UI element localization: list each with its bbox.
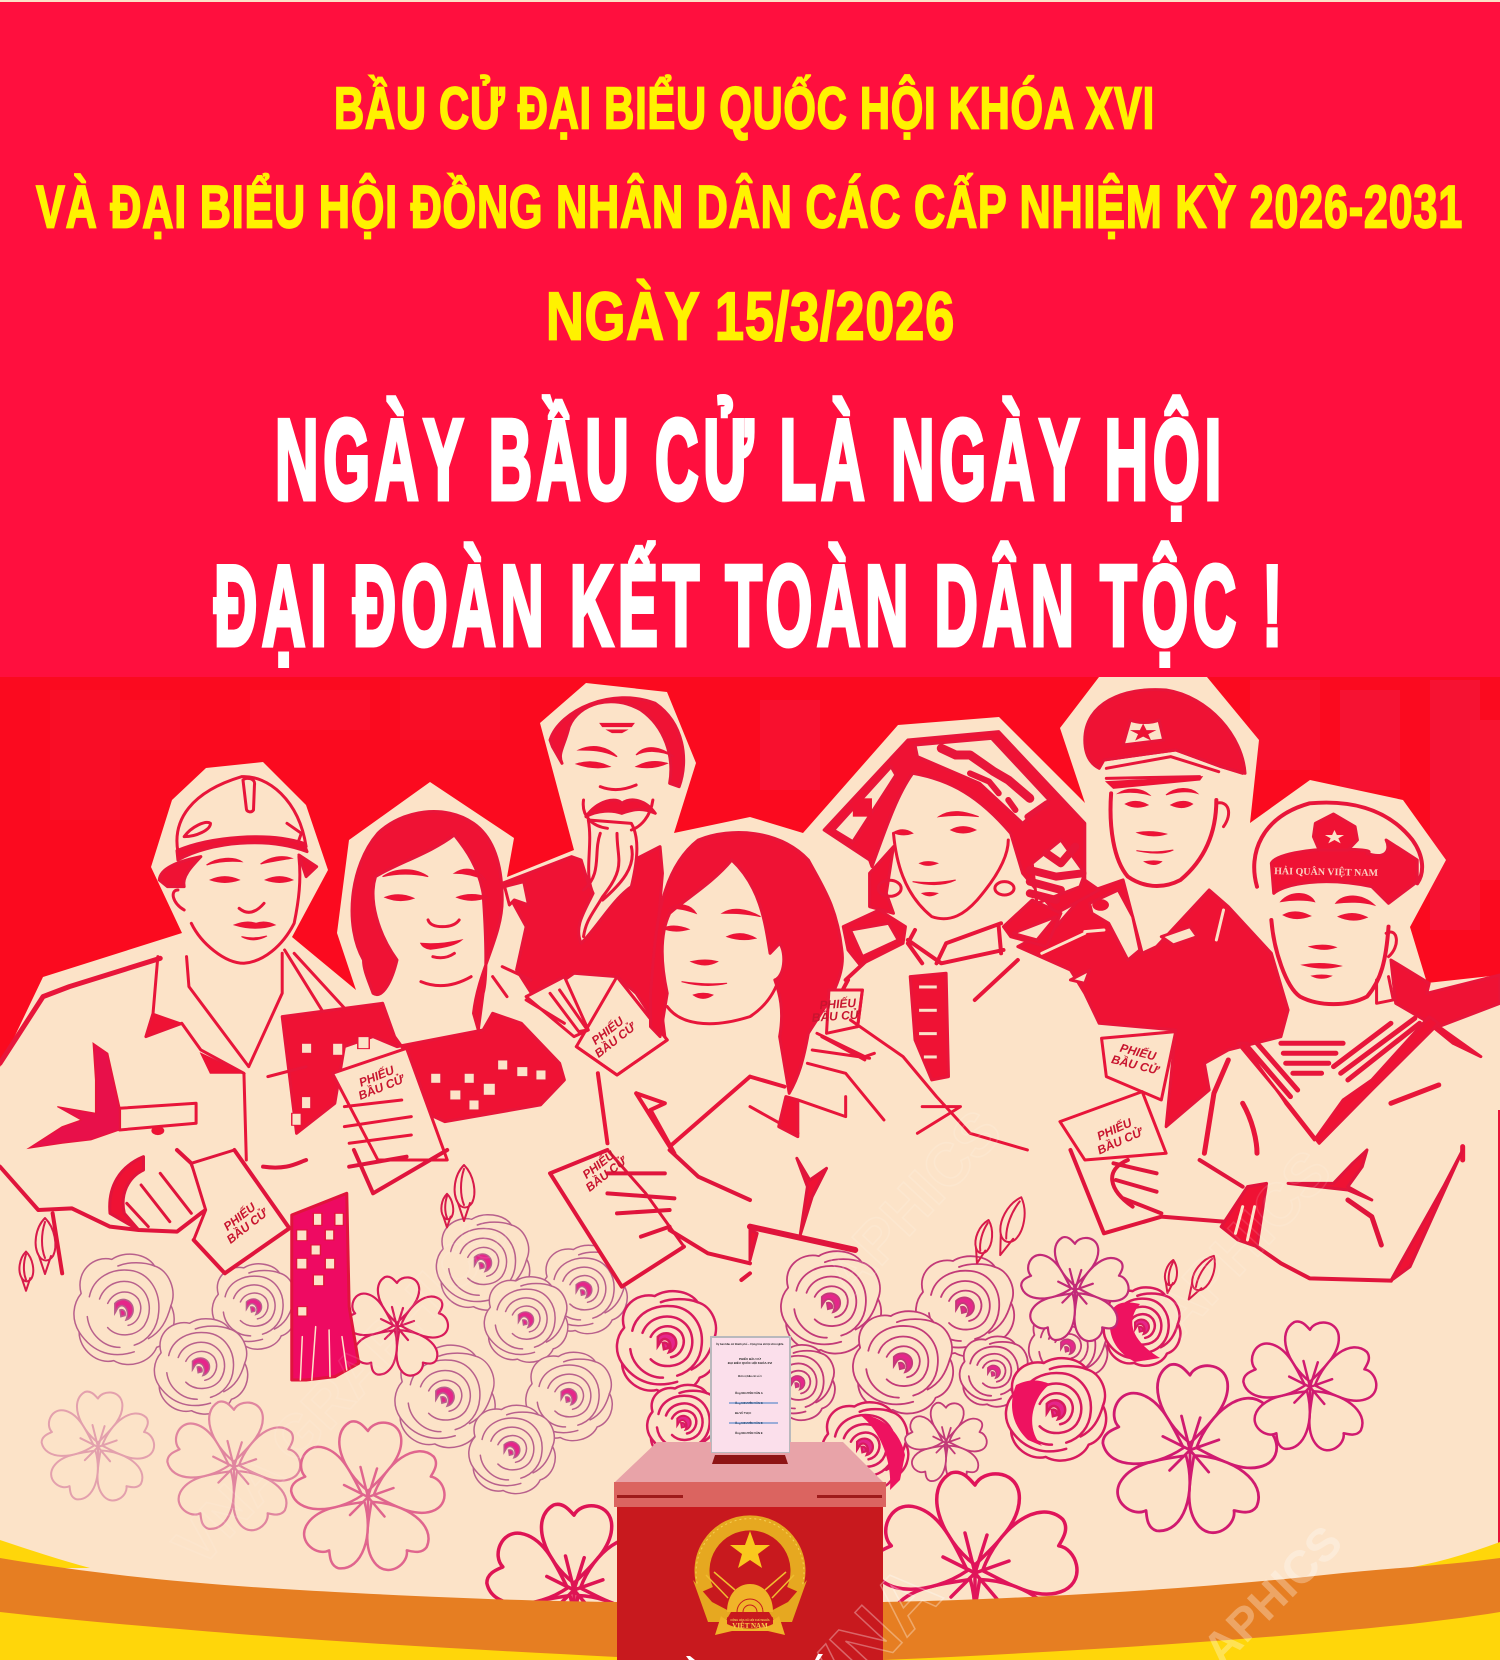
figures, upper right: ethnic woman, officer, sailor [750,690,1500,1160]
ballot text: elder's hand: BẦU CỬ [591,1018,640,1061]
ballot paper: ĐẠI BIỂU QUỐC HỘI KHÓA XVI [728,1360,772,1365]
figures, lower left: hands holding ballots, long scarf [0,1150,750,1380]
officer uniform [1018,880,1288,1127]
white caption fragments at the page edge [686,1654,823,1660]
ballot text: sailor: PHIẾU [1095,1115,1134,1143]
emblem ring [702,1523,798,1590]
box lid top [615,1442,883,1482]
officer cap and face [1085,690,1245,886]
left roses [74,1215,627,1494]
worker's arm, hand and ballot [0,1150,289,1273]
ballot text: ethnic woman: BẦU CỬ [811,1006,862,1025]
ballot paper: Ông NGUYỄN VĂN A [735,1390,763,1395]
banner [715,1616,785,1635]
ballot text: young woman: BẦU CỬ [582,1152,631,1195]
red paper-cut backdrop [0,677,1500,1117]
pale blossoms at left [39,1392,158,1506]
young woman's hair continuation and ballot [750,990,1027,1150]
heading line 1: BẦU CỬ ĐẠI BIỂU QUỐC HỘI KHÓA XVI [334,74,1155,142]
ballot text: sailor: BẦU CỬ [1095,1123,1146,1157]
ballot paper: Ủy ban bầu cử thành phố – Cộng hòa xã hội chủ nghĩa [716,1341,784,1346]
ballot text: ethnic woman: PHIẾU [819,996,857,1012]
ballot box [614,1337,886,1660]
bright roses with solid crescents [617,1287,1180,1491]
national emblem: VIỆT NAM [732,1622,768,1630]
cog wheel [727,1584,773,1612]
watermark: APHICS [811,1097,1014,1309]
ballot paper [711,1337,790,1453]
national emblem: CỘNG HÒA XÃ HỘI CHỦ NGHĨA [730,1617,770,1622]
watermark [161,1097,1352,1660]
flower field: roses and blossoms [19,1165,1381,1660]
worker [0,777,349,1160]
ballot paper: Ông NGUYỄN VĂN E [735,1430,763,1435]
sailor's ballot [1060,1092,1166,1160]
ethnic woman headdress and hair [824,732,1099,1080]
box body [617,1507,883,1660]
ballot paper: Bà VŨ THỊ C [735,1410,751,1415]
ballot paper: Ông NGUYỄN VĂN B [735,1400,763,1405]
raised hand and ballot [576,977,667,1075]
cream silhouette of the crowd [0,677,1500,1660]
elder [493,698,684,1075]
sailor [1204,803,1500,1160]
thin right-edge red line [1498,1110,1500,1560]
figures, upper left: worker, woman, elder, young woman [0,698,842,1160]
woman with scarf [268,811,564,1160]
box lid front [614,1482,886,1507]
bottom waves [0,1540,1500,1660]
rose buds [19,1165,1222,1304]
watermark: APHICS [1141,1137,1344,1349]
header panel: red title band [0,2,1500,677]
strong blossoms [343,1277,452,1381]
officer's ballot [1102,1032,1176,1100]
rice sheaves [693,1580,807,1622]
ballot paper: Đơn vị bầu cử số 1 [738,1374,762,1378]
young woman's ballot and hand [550,1150,750,1287]
woman's lower ballot [263,1150,447,1193]
national emblem [693,1519,807,1635]
ballot text: woman: PHIẾU [357,1063,396,1090]
lid grooves [617,1495,882,1498]
ballot text: worker: PHIẾU [221,1200,258,1234]
ballot labels on the artwork [216,864,1379,1247]
ballot text: elder's hand: PHIẾU [589,1014,626,1048]
ballot text: young woman: PHIẾU [580,1148,617,1182]
ballot paper: PHIẾU BẦU CỬ [739,1356,762,1361]
woman's ballot and hand [332,1048,447,1160]
ballot text: officer: PHIẾU [1118,1041,1157,1063]
watermark: VNA GRAPHICS [161,1198,522,1579]
ballot text: worker: BẦU CỬ [223,1204,272,1247]
date: NGÀY 15/3/2026 [546,278,955,354]
star [730,1531,770,1568]
ballot paper: Ông NGUYỄN VĂN D [735,1420,763,1425]
centre and right roses [761,1251,1107,1420]
ballot slot [712,1455,788,1464]
ballot text: woman: BẦU CỬ [356,1070,408,1103]
young woman [598,833,842,1153]
figures, lower right: sleeve, sailor's hand, cuff [750,1150,1463,1281]
scarf tail [292,1193,359,1380]
sailor cap text: HẢI QUÂN VIỆT NAM [1274,864,1379,879]
ballot text: officer: BẦU CỬ [1110,1051,1162,1078]
